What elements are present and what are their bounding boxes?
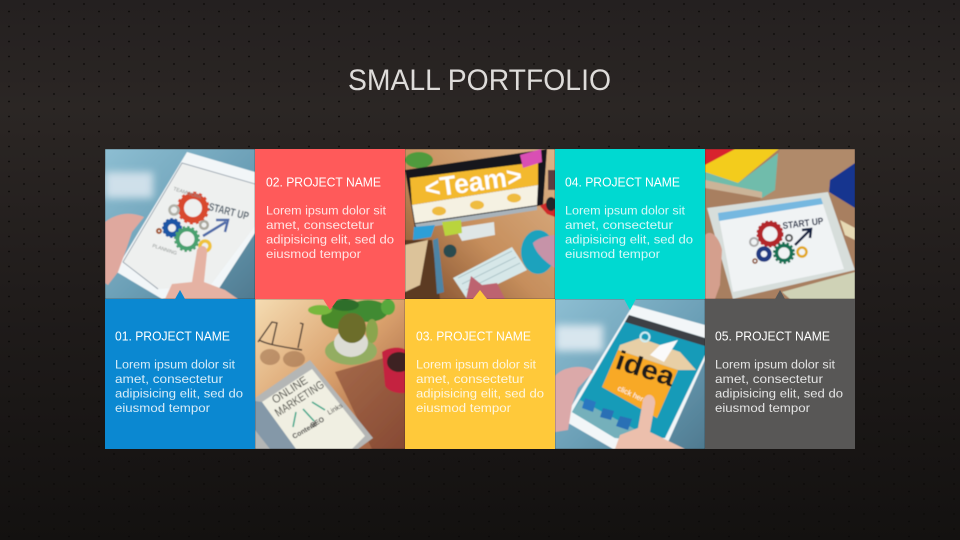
card: 03 project: eiusmod tempor xyxy=(416,401,511,415)
card: 03 project: Lorem ipsum dolor sit xyxy=(416,358,537,372)
card: 05 project xyxy=(705,290,855,449)
title: SMALL PORTFOLIO xyxy=(348,64,611,97)
notch: coral xyxy=(323,299,338,310)
photo: books and tablet: START UP xyxy=(782,216,825,232)
card: 02 project: Lorem ipsum dolor sit xyxy=(266,204,387,218)
card: 05 project: 05. PROJECT NAME xyxy=(715,328,830,344)
photo: online marketing desk xyxy=(255,299,411,449)
photo: online marketing desk: ONLINE xyxy=(270,375,310,407)
card: 02 project: 02. PROJECT NAME xyxy=(266,174,381,190)
photo: idea tablet xyxy=(555,299,705,449)
photo: online marketing desk: SEO xyxy=(310,416,326,430)
photo: team monitor on desk xyxy=(405,149,556,299)
card: 04 project: Lorem ipsum dolor sit xyxy=(565,204,686,218)
card: 05 project: eiusmod tempor xyxy=(715,401,810,415)
notch: blue xyxy=(175,290,185,299)
photo: idea tablet: click here xyxy=(616,384,649,405)
photo: tablet with start up gears: PLANNING xyxy=(151,243,178,257)
card: 04 project xyxy=(555,149,705,299)
card: 02 project xyxy=(255,149,405,299)
card: 04 project: 04. PROJECT NAME xyxy=(565,174,680,190)
card: 05 project: amet, consectetur xyxy=(715,372,823,386)
card: 03 project xyxy=(405,290,555,449)
card: 03 project: amet, consectetur xyxy=(416,372,524,386)
card: 01 project xyxy=(105,290,255,449)
card: 02 project: eiusmod tempor xyxy=(266,247,361,261)
photo: tablet with start up gears: TEAMWORK xyxy=(172,186,203,201)
card: 05 project: Lorem ipsum dolor sit xyxy=(715,358,836,372)
photo: tablet with start up gears: START UP xyxy=(207,201,250,223)
card: 02 project: amet, consectetur xyxy=(266,218,374,232)
photo: online marketing desk: MARKETING xyxy=(273,379,327,420)
card: 03 project: adipisicing elit, sed do xyxy=(416,386,544,400)
card: 04 project: amet, consectetur xyxy=(565,218,673,232)
notch: teal xyxy=(624,299,636,310)
card: 01 project: Lorem ipsum dolor sit xyxy=(115,358,236,372)
photo: books and tablet xyxy=(705,149,855,299)
card: 01 project: eiusmod tempor xyxy=(115,401,210,415)
photo: idea tablet: idea xyxy=(612,345,680,393)
photo: online marketing desk: Links xyxy=(326,402,345,417)
photo: online marketing desk: Content xyxy=(292,421,318,441)
photo: team monitor on desk: <Team> xyxy=(423,161,524,204)
card: 04 project: eiusmod tempor xyxy=(565,247,660,261)
card: 01 project: 01. PROJECT NAME xyxy=(115,328,230,344)
card: 03 project: 03. PROJECT NAME xyxy=(416,328,531,344)
card: 05 project: adipisicing elit, sed do xyxy=(715,386,843,400)
card: 04 project: adipisicing elit, sed do xyxy=(565,232,693,246)
notch: yellow xyxy=(473,290,487,299)
card: 02 project: adipisicing elit, sed do xyxy=(266,232,394,246)
portfolio grid xyxy=(105,149,855,449)
notch: grey xyxy=(775,290,785,299)
card: 01 project: adipisicing elit, sed do xyxy=(115,386,243,400)
card: 01 project: amet, consectetur xyxy=(115,372,223,386)
photo: tablet with start up gears xyxy=(105,149,255,299)
